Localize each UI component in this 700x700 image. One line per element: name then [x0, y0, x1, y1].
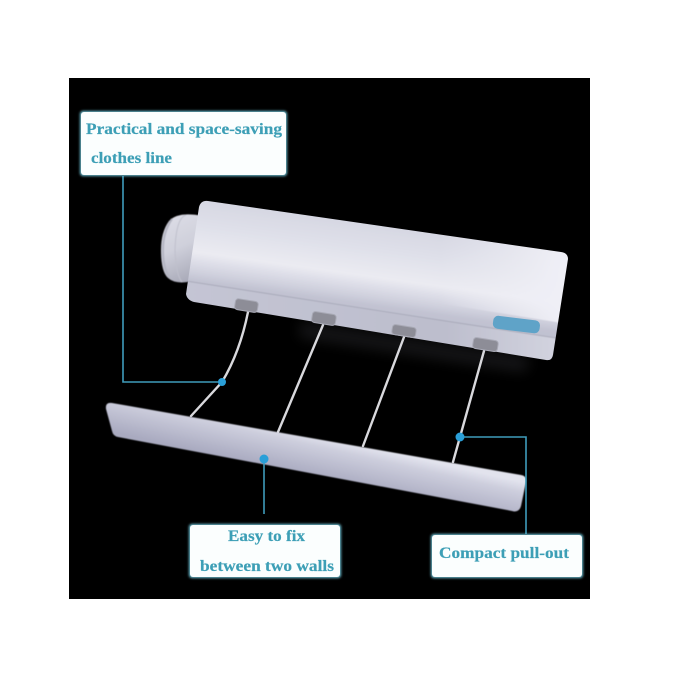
icon: clothes line casing [180, 195, 575, 365]
callout: practical and space-saving: clothes line [91, 150, 172, 167]
callout: practical and space-saving [80, 111, 287, 176]
callout: easy to fix [189, 524, 341, 578]
icon: blue tag [492, 315, 541, 334]
casing shadow [300, 322, 530, 372]
callout leader: bar [260, 454, 268, 514]
icon: knob [161, 214, 203, 282]
callout: compact pull-out [431, 534, 583, 578]
callout: practical and space-saving: Practical and space-saving [86, 121, 282, 138]
callout leader: clothes line [123, 176, 226, 386]
icon: pull-out bar [106, 403, 526, 511]
icon: pull-out strings [191, 312, 484, 462]
black background panel [69, 78, 590, 599]
callout: easy to fix: Easy to fix [228, 528, 305, 545]
callout: easy to fix: between two walls [200, 558, 334, 575]
icon: string slots [234, 298, 499, 352]
infographic [69, 78, 590, 599]
callout: compact pull-out: Compact pull-out [439, 545, 570, 562]
callout leader: pull-out [456, 432, 526, 534]
